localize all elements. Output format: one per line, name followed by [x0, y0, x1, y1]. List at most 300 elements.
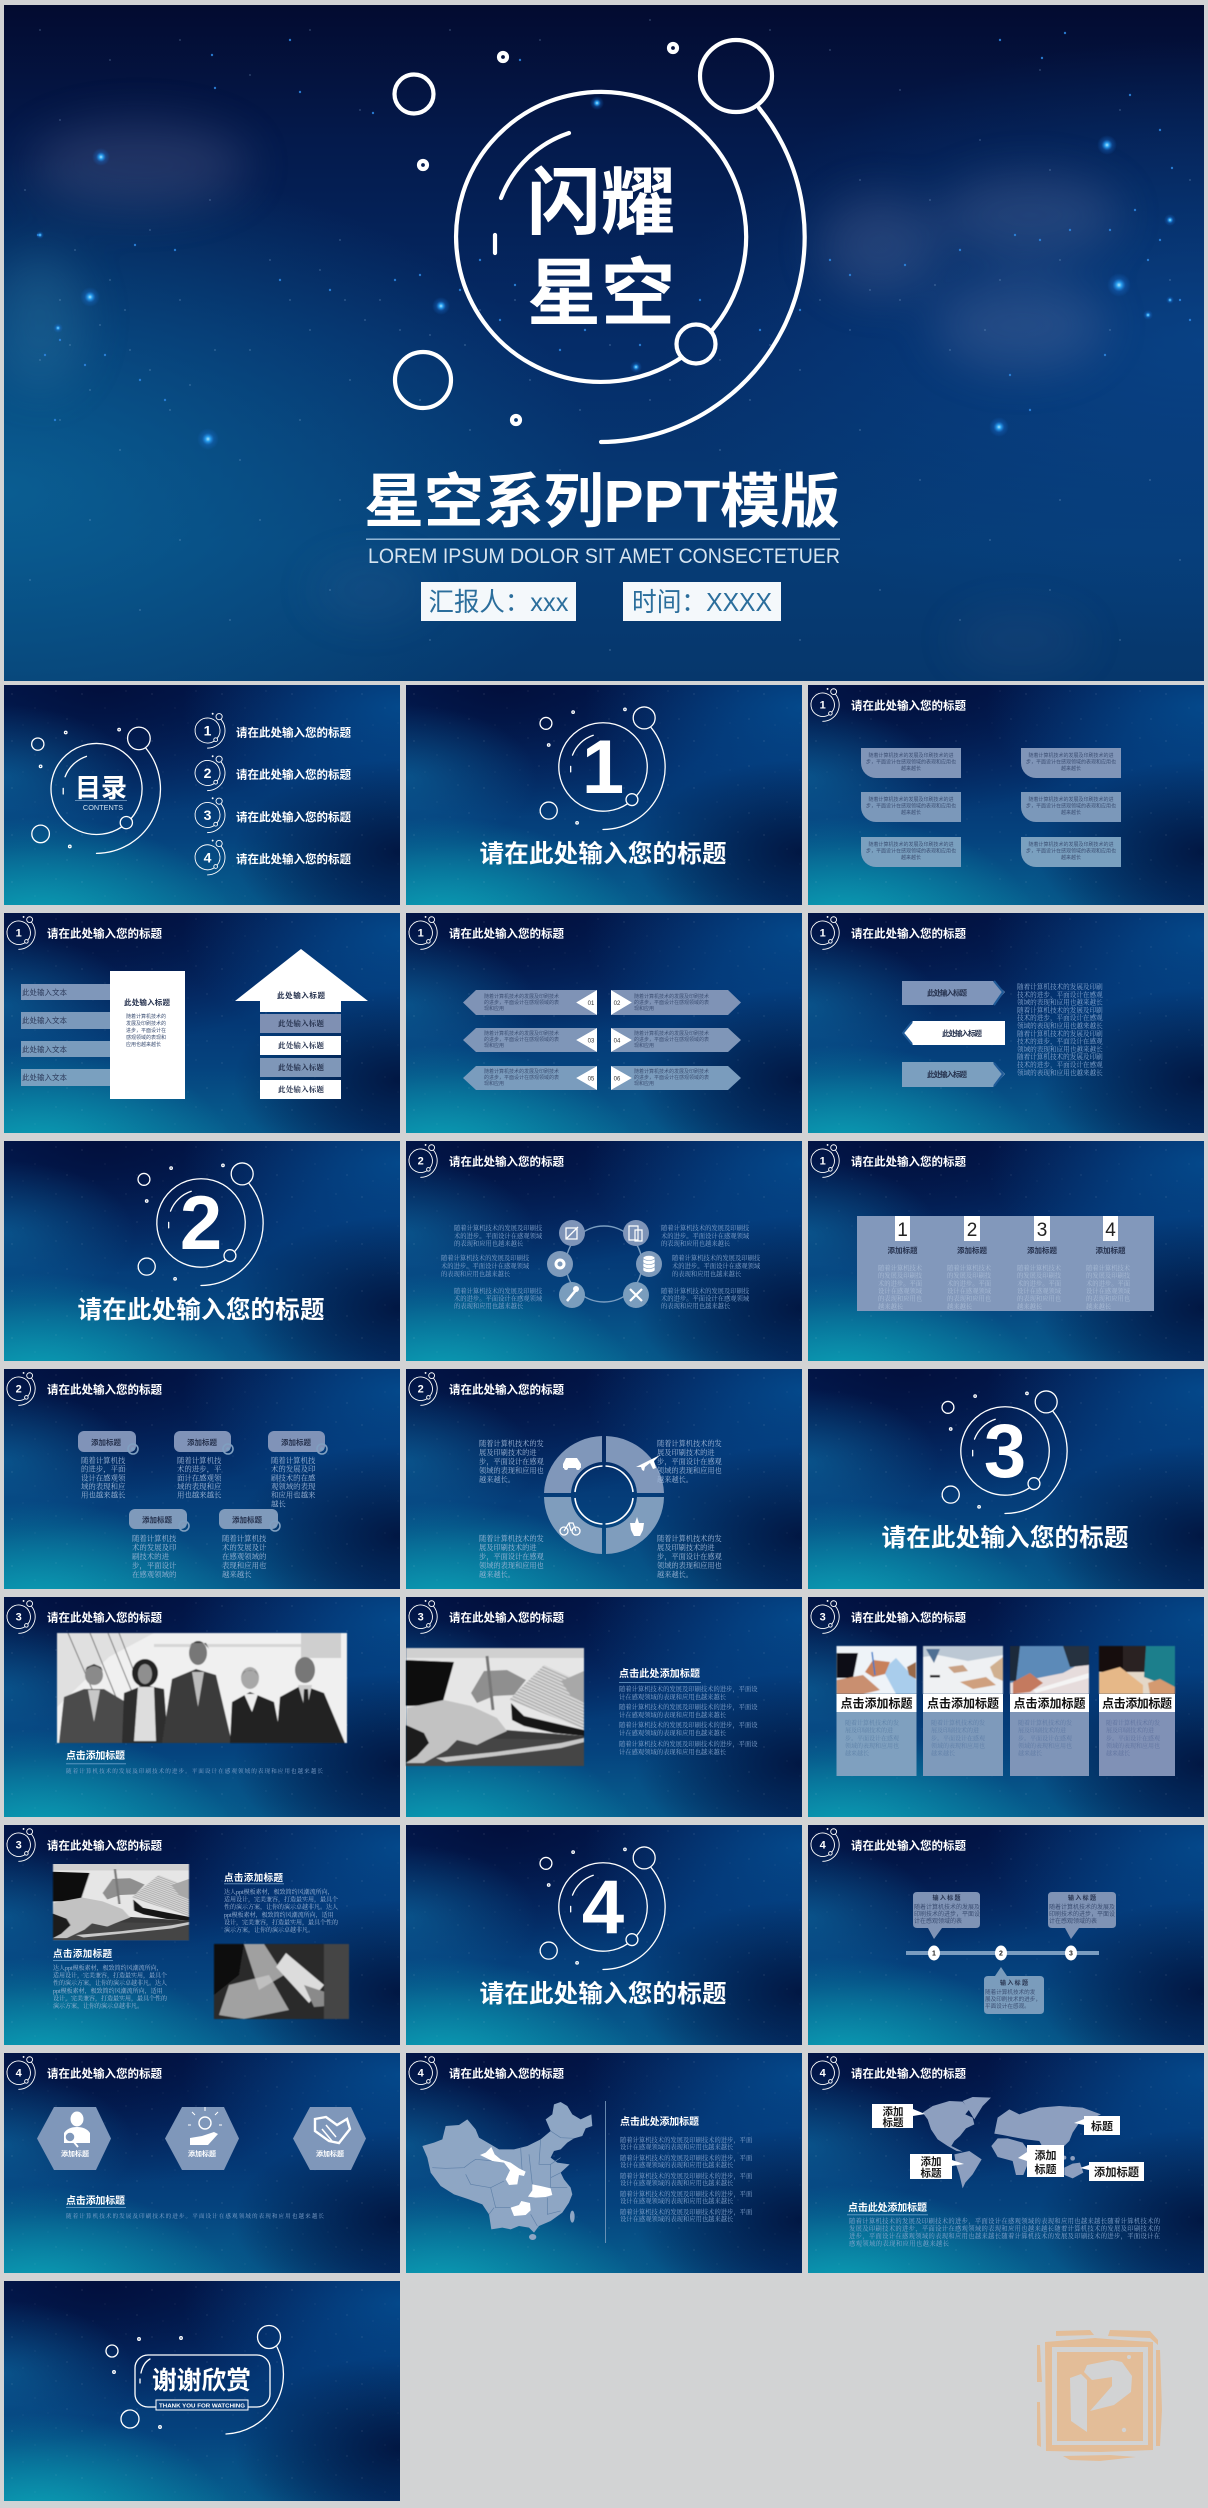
- white panel: 进步，平面设计在: [126, 1027, 166, 1034]
- column 4: 展及印刷技术的进: [1106, 1727, 1154, 1735]
- side text: 随着计算机技术的发展及印刷: [1017, 1005, 1103, 1014]
- numbered panel: 的发展及印刷技: [878, 1271, 923, 1280]
- text block upper: 设计，完美兼容，打造最实用，最具个性的: [224, 1918, 338, 1926]
- scroll tag 4: 在感观领域的: [132, 1570, 177, 1579]
- label: north america: 标题: [882, 2116, 904, 2129]
- numbered panel: 2: [967, 1220, 977, 1241]
- header: 请在此处输入您的标题: [47, 2067, 162, 2081]
- scroll tag 5: 表现和应用也: [222, 1561, 267, 1570]
- numbered panel: 随着计算机技术: [947, 1263, 992, 1272]
- label: south america: 标题: [920, 2166, 942, 2180]
- text block upper: 适用设计，完美兼容，打造最实用，最具个: [224, 1896, 338, 1904]
- donut texts: 步，平面设计在感观: [479, 1552, 544, 1562]
- arrow row 2: [463, 1028, 741, 1052]
- column 2: 展及印刷技术的进: [931, 1727, 979, 1735]
- header: 请在此处输入您的标题: [449, 2067, 564, 2081]
- numbered panel: 设计在感观领域: [878, 1286, 923, 1295]
- scroll tag 4: [129, 1509, 189, 1579]
- header: 请在此处输入您的标题: [851, 699, 966, 713]
- donut texts: 步，平面设计在感观: [657, 1552, 722, 1562]
- card 5: [861, 837, 961, 867]
- header: 请在此处输入您的标题: [851, 927, 966, 941]
- header: [409, 916, 564, 949]
- scroll tag 1: [78, 1431, 138, 1500]
- map text: 随着计算机技术的发展及印刷技术的进步，平面: [620, 2207, 753, 2216]
- presenter box: 汇报人：xxx: [428, 587, 568, 617]
- contents orbit: [32, 727, 160, 853]
- side text: 领域的表现和应用也越来越长: [1017, 1068, 1103, 1077]
- label: south america: [910, 2154, 964, 2180]
- section orbit: [540, 1847, 665, 1970]
- donut texts: 步，平面设计在感观: [657, 1457, 722, 1467]
- right texts: 术的进步。平面设计在感观领域: [672, 1261, 761, 1270]
- text block: 随着计算机技术的发展及印刷技术的进步，平面设: [619, 1702, 758, 1711]
- arrow row 1: [463, 990, 741, 1015]
- text block upper: ppt模板素材，极致简约风潮流所向，适用: [224, 1911, 334, 1919]
- header: 请在此处输入您的标题: [47, 1839, 162, 1853]
- scroll tag 2: 面计在感观领: [177, 1473, 222, 1482]
- watermark logo: [1037, 2330, 1162, 2461]
- contents item 1: 请在此处输入您的标题: [236, 725, 352, 739]
- callout 2: 输入标题: [1068, 1894, 1096, 1902]
- white panel: 感观领域的表现和: [126, 1034, 166, 1041]
- donut texts: 领域的表现和应用也: [479, 1561, 544, 1570]
- contents item 1: [195, 713, 352, 748]
- thank-you title: 谢谢欣赏: [152, 2367, 251, 2395]
- scroll tag 2: [174, 1431, 233, 1500]
- caption: [66, 1749, 323, 1775]
- contents item 3: 3: [204, 807, 212, 823]
- header: 请在此处输入您的标题: [47, 1383, 162, 1397]
- slide: two photos two texts: [4, 1825, 400, 2045]
- side text: 领域的表现和应用也越来越长: [1017, 1021, 1103, 1030]
- map: china: [422, 2102, 592, 2240]
- header: 请在此处输入您的标题: [449, 1383, 564, 1397]
- card 1: 越来越长: [901, 765, 921, 772]
- numbered panel: 的表现和应用也: [1017, 1294, 1062, 1303]
- header: [7, 916, 162, 949]
- contents item 3: [195, 798, 352, 833]
- contents item 3: 请在此处输入您的标题: [236, 810, 352, 824]
- map text: [620, 2115, 753, 2223]
- text block: 随着计算机技术的发展及印刷技术的进步，平面设: [619, 1720, 758, 1729]
- scroll tag 3: 随着计算机技: [271, 1456, 316, 1465]
- column 3: 展及印刷技术的进: [1018, 1727, 1066, 1735]
- text bars: 此处输入文本: [22, 1072, 67, 1082]
- section title: 请在此处输入您的标题: [78, 1296, 324, 1324]
- donut texts: 越来越长。: [657, 1475, 693, 1484]
- header: [409, 1144, 564, 1177]
- slide: bars and arrow: [4, 913, 400, 1133]
- header: 4: [820, 1840, 827, 1852]
- callout 1: [913, 1892, 980, 1939]
- header: [811, 1144, 966, 1177]
- tag 2: [902, 1021, 1005, 1045]
- slide: timeline: [808, 1825, 1204, 2045]
- scroll tag 5: 在感观领域的: [222, 1552, 267, 1561]
- slide: hexagon icons: [4, 2053, 400, 2273]
- numbered panel: 添加标题: [1096, 1245, 1126, 1255]
- numbered panel: 添加标题: [888, 1245, 918, 1255]
- scroll tag 4: 刷技术的进: [132, 1552, 170, 1561]
- text block: [619, 1667, 758, 1756]
- date box: 时间：XXXX: [632, 587, 772, 617]
- contents item 4: [195, 840, 352, 875]
- numbered panel: 1: [897, 1220, 908, 1241]
- arrow row 3: 的进步，平面设计在感观领域的表: [634, 1074, 709, 1081]
- map text: 随着计算机技术的发展及印刷技术的进步，平面: [620, 2153, 753, 2162]
- column 2: 越来越长: [931, 1750, 955, 1758]
- column 1: 随着计算机技术的发: [845, 1719, 899, 1727]
- column 4: 越来越长: [1106, 1750, 1130, 1758]
- scroll tag 3: 添加标题: [281, 1437, 312, 1447]
- hexagon: person: [37, 2107, 111, 2170]
- header: [811, 1600, 966, 1633]
- map text: 设计在感观领域的表现和应用也越来越长: [620, 2214, 734, 2223]
- callout 3: [984, 1967, 1044, 2014]
- header: [7, 1600, 162, 1633]
- slide: team photo: [4, 1597, 400, 1817]
- text block upper: 性的演示方案，让你的演示卓越非凡。达人: [224, 1903, 338, 1911]
- thank-you subtitle: THANK YOU FOR WATCHING: [159, 2404, 246, 2410]
- numbered panel: 的发展及印刷技: [1017, 1271, 1062, 1280]
- arrow row 1: 02: [614, 1001, 621, 1007]
- column 1: 越来越长: [845, 1750, 869, 1758]
- slide: six note cards: [808, 685, 1204, 905]
- right texts: 的表现和应用也越来越长: [661, 1238, 731, 1248]
- scroll tag 2: 添加标题: [187, 1437, 218, 1447]
- contents heading: CONTENTS: [83, 803, 123, 812]
- donut texts: 越来越长。: [479, 1570, 515, 1579]
- numbered panel: 越来越长: [947, 1301, 973, 1310]
- column 3: 越来越长: [1018, 1750, 1042, 1758]
- card 2: 步，平面设计在感观领域的表现和应用也: [1026, 758, 1116, 766]
- numbered panel: 术的进步。平面: [1017, 1278, 1062, 1287]
- scroll tag 2: 随着计算机技: [177, 1456, 222, 1465]
- label: australia: [1080, 2162, 1144, 2181]
- callout 3: 展及印刷技术的进步，: [985, 1995, 1041, 2003]
- map text: 随着计算机技术的发展及印刷技术的进步，平面: [620, 2135, 753, 2144]
- card 4: 越来越长: [1061, 809, 1081, 816]
- tag 1: 此处输入标题: [927, 988, 968, 998]
- numbered panel: 术的进步。平面: [947, 1278, 992, 1287]
- scroll tag 3: 和应用也越来: [271, 1491, 316, 1500]
- arrow row 2: 随着计算机技术的发展及印刷技术: [634, 1030, 709, 1037]
- text block upper: 达人ppt模板素材，极致简约风潮流所向，: [224, 1888, 334, 1896]
- column 3: [1010, 1646, 1089, 1776]
- header: 请在此处输入您的标题: [851, 2067, 966, 2081]
- callout 2: 随着计算机技术的发展及: [1049, 1903, 1115, 1911]
- header: 2: [418, 1156, 424, 1168]
- text block: 计在感观领域的表现和应用也越来越长: [619, 1692, 727, 1701]
- header: [811, 688, 966, 721]
- scroll tag 3: [268, 1431, 327, 1508]
- numbered panel: 术的进步。平面: [1086, 1278, 1131, 1287]
- slide: paired arrows: [406, 913, 802, 1133]
- donut texts: 展及印刷技术的进: [479, 1448, 537, 1457]
- numbered panel: 设计在感观领域: [947, 1286, 992, 1295]
- numbered panel: 的发展及印刷技: [947, 1271, 992, 1280]
- column 2: [923, 1646, 1003, 1776]
- left texts: 随着计算机技术的发展及印刷技: [454, 1223, 543, 1232]
- contents item 4: 4: [204, 849, 212, 865]
- slide: donut with icons: [406, 1369, 802, 1589]
- card 2: [1021, 748, 1121, 778]
- numbered panel: 的表现和应用也: [878, 1294, 923, 1303]
- donut texts: 展及印刷技术的进: [479, 1543, 537, 1552]
- map text: 随着计算机技术的发展及印刷技术的进步，平面: [620, 2189, 753, 2198]
- right texts: [661, 1223, 761, 1310]
- slide: section 3: [808, 1369, 1204, 1589]
- header: 请在此处输入您的标题: [851, 1155, 966, 1169]
- callout 2: 计在感观领域的表: [1049, 1917, 1097, 1925]
- up arrow stack: 此处输入标题: [277, 990, 326, 1000]
- left texts: [441, 1223, 543, 1310]
- panel: cover slide: [0, 5, 1204, 681]
- arrow row 1: 现和应用: [484, 1005, 504, 1012]
- label: australia: 添加标题: [1094, 2165, 1139, 2179]
- hexagon: idea: 添加标题: [188, 2149, 216, 2158]
- main title: 闪耀: [527, 161, 675, 244]
- text block: 计在感观领域的表现和应用也越来越长: [619, 1747, 727, 1756]
- text block: 计在感观领域的表现和应用也越来越长: [619, 1728, 727, 1737]
- side text: 技术的进步，平面设计在感观: [1017, 990, 1103, 1000]
- text bars: 此处输入文本: [22, 1044, 67, 1054]
- text block upper: [224, 1872, 338, 1934]
- header: 请在此处输入您的标题: [47, 1611, 162, 1625]
- map: world: [923, 2097, 1101, 2188]
- slide: tags with text: [808, 913, 1204, 1133]
- label: africa: 标题: [1034, 2162, 1056, 2176]
- section title: 请在此处输入您的标题: [480, 840, 726, 868]
- timeline: 1: [932, 1950, 936, 1958]
- numbered panel: 越来越长: [878, 1301, 904, 1310]
- slide: four numbered columns: [808, 1141, 1204, 1361]
- text bars: [21, 984, 110, 1086]
- callout 1: 输入标题: [932, 1894, 960, 1902]
- donut texts: 随着计算机技术的发: [657, 1439, 722, 1448]
- numbered panel: 设计在感观领域: [1017, 1286, 1062, 1295]
- scroll tag 5: 术的发展及计: [222, 1543, 267, 1552]
- arrow row 1: 现和应用: [634, 1005, 654, 1012]
- text block upper: 演示方案，让你的演示卓越非凡。: [224, 1926, 314, 1934]
- label: south america: 添加: [920, 2155, 942, 2168]
- text bars: 此处输入文本: [22, 1015, 67, 1025]
- map text: 设计在感观领域的表现和应用也越来越长: [620, 2142, 734, 2151]
- scroll tag 1: 设计在感观领: [81, 1473, 126, 1482]
- label: north america: 添加: [882, 2105, 904, 2118]
- contents heading: 目录: [75, 773, 127, 803]
- header: 2: [418, 1384, 424, 1396]
- numbered panel: 设计在感观领域: [1086, 1286, 1131, 1295]
- numbered panel: 添加标题: [1027, 1245, 1058, 1255]
- scroll tag 5: 添加标题: [232, 1514, 262, 1524]
- white panel: 此处输入标题: [124, 997, 170, 1007]
- numbered panel: 随着计算机技术: [1086, 1263, 1131, 1272]
- numbered panel: 越来越长: [1086, 1301, 1112, 1310]
- timeline: [906, 1946, 1099, 1960]
- header: [811, 1828, 966, 1861]
- side text: 技术的进步，平面设计在感观: [1017, 1060, 1103, 1070]
- scroll tag 5: 越来越长: [222, 1570, 252, 1579]
- card 3: 步，平面设计在感观领域的表现和应用也: [866, 802, 956, 810]
- header: 4: [820, 2068, 827, 2080]
- section orbit: [138, 1163, 263, 1286]
- card 6: 随着计算机技术的发展及印刷技术的进: [1028, 841, 1114, 848]
- side text: 随着计算机技术的发展及印刷: [1017, 1029, 1103, 1038]
- side text: 技术的进步，平面设计在感观: [1017, 1037, 1103, 1047]
- contents item 4: 请在此处输入您的标题: [236, 852, 352, 866]
- numbered panel: 3: [1037, 1220, 1047, 1241]
- header: [7, 1828, 162, 1861]
- card 6: 越来越长: [1061, 854, 1081, 861]
- label: north america: [872, 2104, 925, 2129]
- contents item 2: [195, 756, 352, 791]
- up arrow stack: 此处输入标题: [278, 1062, 324, 1072]
- scroll tag 3: 越长: [271, 1499, 286, 1508]
- donut texts: 展及印刷技术的进: [657, 1543, 715, 1552]
- photo: handshake: [53, 1864, 189, 1940]
- slide: section 2: [4, 1141, 400, 1361]
- side text: 随着计算机技术的发展及印刷: [1017, 982, 1103, 991]
- tag 2: 此处输入标题: [942, 1028, 982, 1038]
- right texts: 术的进步。平面设计在感观领域: [661, 1294, 750, 1302]
- numbered panel: 的发展及印刷技: [1086, 1271, 1131, 1280]
- donut chart: [544, 1436, 664, 1554]
- callout 3: 输入标题: [1000, 1979, 1028, 1987]
- arrow row 2: 现和应用: [484, 1042, 504, 1049]
- timeline: 3: [1069, 1950, 1073, 1958]
- callout 3: 平面设计在感观。: [985, 2002, 1030, 2010]
- column 3: 点击添加标题: [1014, 1696, 1086, 1710]
- contents item 2: 请在此处输入您的标题: [236, 768, 352, 782]
- left texts: 随着计算机技术的发展及印刷技: [441, 1253, 530, 1262]
- scroll tag 4: 随着计算机技: [132, 1534, 177, 1543]
- right texts: 随着计算机技术的发展及印刷技: [661, 1223, 750, 1232]
- map text: 随着计算机技术的发展及印刷技术的进步，平面: [620, 2171, 753, 2180]
- text block lower: [53, 1948, 167, 2010]
- caption: 点击添加标题: [66, 2194, 125, 2207]
- slide: world map: [808, 2053, 1204, 2273]
- donut texts: 领域的表现和应用也: [657, 1466, 722, 1475]
- photo: signing document: [214, 1944, 349, 2019]
- tag 3: [902, 1062, 1005, 1087]
- arrow row 2: 04: [614, 1038, 621, 1044]
- scroll tag 1: 域的表现和应: [81, 1482, 126, 1491]
- map text: [847, 2201, 1161, 2248]
- header: 3: [820, 1612, 826, 1624]
- arrow row 1: 随着计算机技术的发展及印刷技术: [634, 993, 709, 1000]
- column 4: [1099, 1646, 1175, 1776]
- numbered panel: 越来越长: [1017, 1301, 1043, 1310]
- column 2: 领域的表现和应用也: [931, 1742, 985, 1750]
- text block lower: ppt模板素材，极致简约风潮流所向，适用: [53, 1987, 163, 1995]
- callout 2: 印刷技术的进步，平面设: [1049, 1910, 1115, 1918]
- left texts: 术的进步。平面设计在感观领域: [454, 1231, 543, 1240]
- text block: 计在感观领域的表现和应用也越来越长: [619, 1710, 727, 1719]
- section orbit: [942, 1391, 1067, 1514]
- numbered panel: 术的进步。平面: [878, 1278, 923, 1287]
- arrow row 2: 03: [588, 1038, 595, 1044]
- card 5: 随着计算机技术的发展及印刷技术的进: [868, 841, 954, 848]
- column 3: 领域的表现和应用也: [1018, 1742, 1072, 1750]
- header: 3: [16, 1612, 22, 1624]
- card 3: [861, 792, 961, 822]
- map text: 设计在感观领域的表现和应用也越来越长: [620, 2160, 734, 2169]
- header: 3: [16, 1840, 22, 1852]
- arrow row 1: 的进步，平面设计在感观领域的表: [484, 999, 559, 1006]
- text block lower: 性的演示方案，让你的演示卓越非凡。达人: [53, 1979, 167, 1987]
- scroll tag 5: 随着计算机技: [222, 1534, 267, 1543]
- scroll tag 3: 观领域的表现: [271, 1482, 316, 1491]
- column 2: 随着计算机技术的发: [931, 1719, 985, 1727]
- scroll tag 3: 术的发展及印: [271, 1465, 316, 1474]
- arrow row 3: 随着计算机技术的发展及印刷技术: [634, 1068, 709, 1075]
- section title: 请在此处输入您的标题: [480, 1980, 726, 2008]
- side text: 随着计算机技术的发展及印刷: [1017, 1052, 1103, 1061]
- slide: section 1: [406, 685, 802, 905]
- tag 3: 此处输入标题: [927, 1069, 968, 1079]
- header: 4: [418, 2068, 425, 2080]
- column 2: 点击添加标题: [927, 1696, 999, 1710]
- card 2: 越来越长: [1061, 765, 1081, 772]
- header: 1: [820, 1156, 826, 1168]
- numbered panel: 4: [1105, 1220, 1116, 1241]
- up arrow stack: 此处输入标题: [278, 1040, 324, 1050]
- slide: handshake photo with text: [406, 1597, 802, 1817]
- arrow row 3: [463, 1066, 741, 1090]
- arrow row 2: 现和应用: [634, 1042, 654, 1049]
- map text: 设计在感观领域的表现和应用也越来越长: [620, 2196, 734, 2205]
- white panel: [110, 971, 185, 1099]
- numbered panel: 的表现和应用也: [947, 1294, 992, 1303]
- column 1: 领域的表现和应用也: [845, 1742, 899, 1750]
- donut texts: [479, 1439, 722, 1579]
- header: 3: [418, 1612, 424, 1624]
- divider: [604, 2101, 607, 2243]
- scroll tag 1: 用也越来越长: [81, 1491, 126, 1500]
- label: asia: [1074, 2116, 1120, 2135]
- header: 请在此处输入您的标题: [851, 1611, 966, 1625]
- arrow row 2: 的进步，平面设计在感观领域的表: [634, 1036, 709, 1043]
- scroll tag 2: 用也越来越长: [177, 1491, 222, 1500]
- header: 1: [820, 700, 826, 712]
- column 4: 步。平面设计在感观: [1106, 1734, 1160, 1742]
- right texts: 随着计算机技术的发展及印刷技: [672, 1253, 761, 1262]
- side text: 领域的表现和应用也越来越长: [1017, 1044, 1103, 1053]
- text block: 点击此处添加标题: [619, 1667, 700, 1680]
- header: [811, 916, 966, 949]
- numbered panel: [857, 1216, 1154, 1311]
- main title: 星空: [527, 252, 675, 335]
- header: [7, 2056, 162, 2089]
- donut texts: 步，平面设计在感观: [479, 1457, 544, 1467]
- column 1: [836, 1646, 916, 1776]
- map text: 感观领域的表现和应用也越来越长: [849, 2238, 950, 2248]
- arrow row 2: 随着计算机技术的发展及印刷技术: [484, 1030, 559, 1037]
- text block lower: 达人ppt模板素材，极致简约风潮流所向，: [53, 1964, 163, 1972]
- map text: 设计在感观领域的表现和应用也越来越长: [620, 2178, 734, 2187]
- donut texts: 领域的表现和应用也: [479, 1466, 544, 1475]
- caption: 随着计算机技术的发展及印刷技术的进步。平面设计在感观领域的表现和应用也越来越长: [66, 1767, 323, 1775]
- slide: thank you: [4, 2281, 400, 2501]
- map text: 发展及印刷技术的进步，平面设计在感观领域的表现和应用也越来越长随着计算机技术的发展及印刷技术的: [849, 2224, 1161, 2232]
- card 4: 步，平面设计在感观领域的表现和应用也: [1026, 802, 1116, 810]
- slide: section 4: [406, 1825, 802, 2045]
- label: africa: [1018, 2145, 1064, 2177]
- thank-you subtitle: [156, 2400, 248, 2410]
- hexagon: handshake: 添加标题: [316, 2149, 344, 2158]
